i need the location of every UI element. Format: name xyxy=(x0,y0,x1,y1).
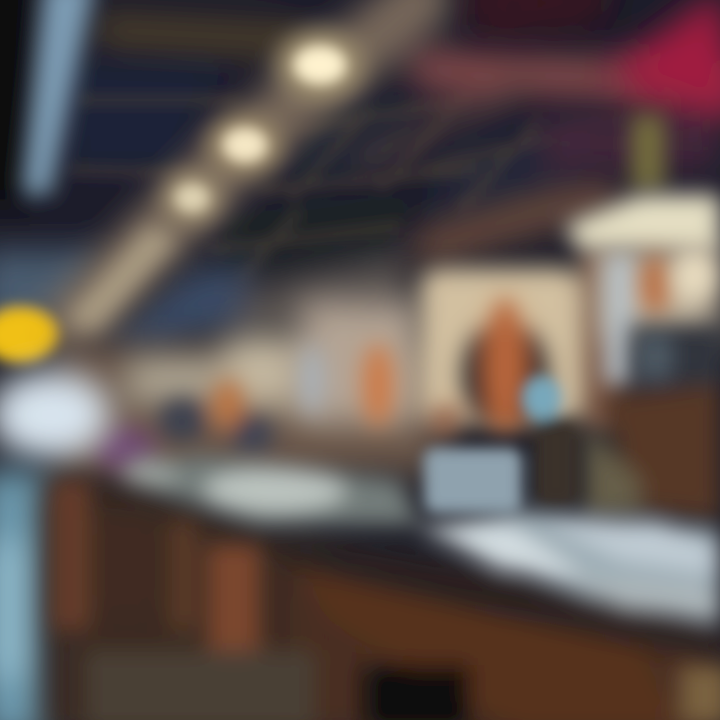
light streak: blue vertical xyxy=(22,0,95,195)
mid band: warm back wall xyxy=(60,300,440,475)
yellow blob xyxy=(0,307,58,363)
bottle and glass xyxy=(424,376,578,513)
figures: silhouettes and orange xyxy=(95,297,549,474)
ceiling: blue lower wall band xyxy=(0,250,410,350)
arch: cream wall xyxy=(420,250,620,430)
table: dark legs xyxy=(300,570,720,720)
table: edge shadow xyxy=(280,535,720,655)
blue white glow: left xyxy=(0,371,110,720)
ceiling: dark panels xyxy=(0,0,720,270)
lamp: right hanging xyxy=(565,115,720,385)
ceiling: crimson corner xyxy=(470,0,720,170)
ceiling: brown beams xyxy=(70,0,720,325)
ceiling lights xyxy=(65,29,364,335)
chairs: wooden posts xyxy=(52,480,315,720)
table: front wood and chairs xyxy=(45,480,720,720)
ceiling: lattice lines xyxy=(70,90,620,280)
tabletop: white surfaces xyxy=(120,455,720,625)
right side: dark figures and wood xyxy=(585,325,720,520)
